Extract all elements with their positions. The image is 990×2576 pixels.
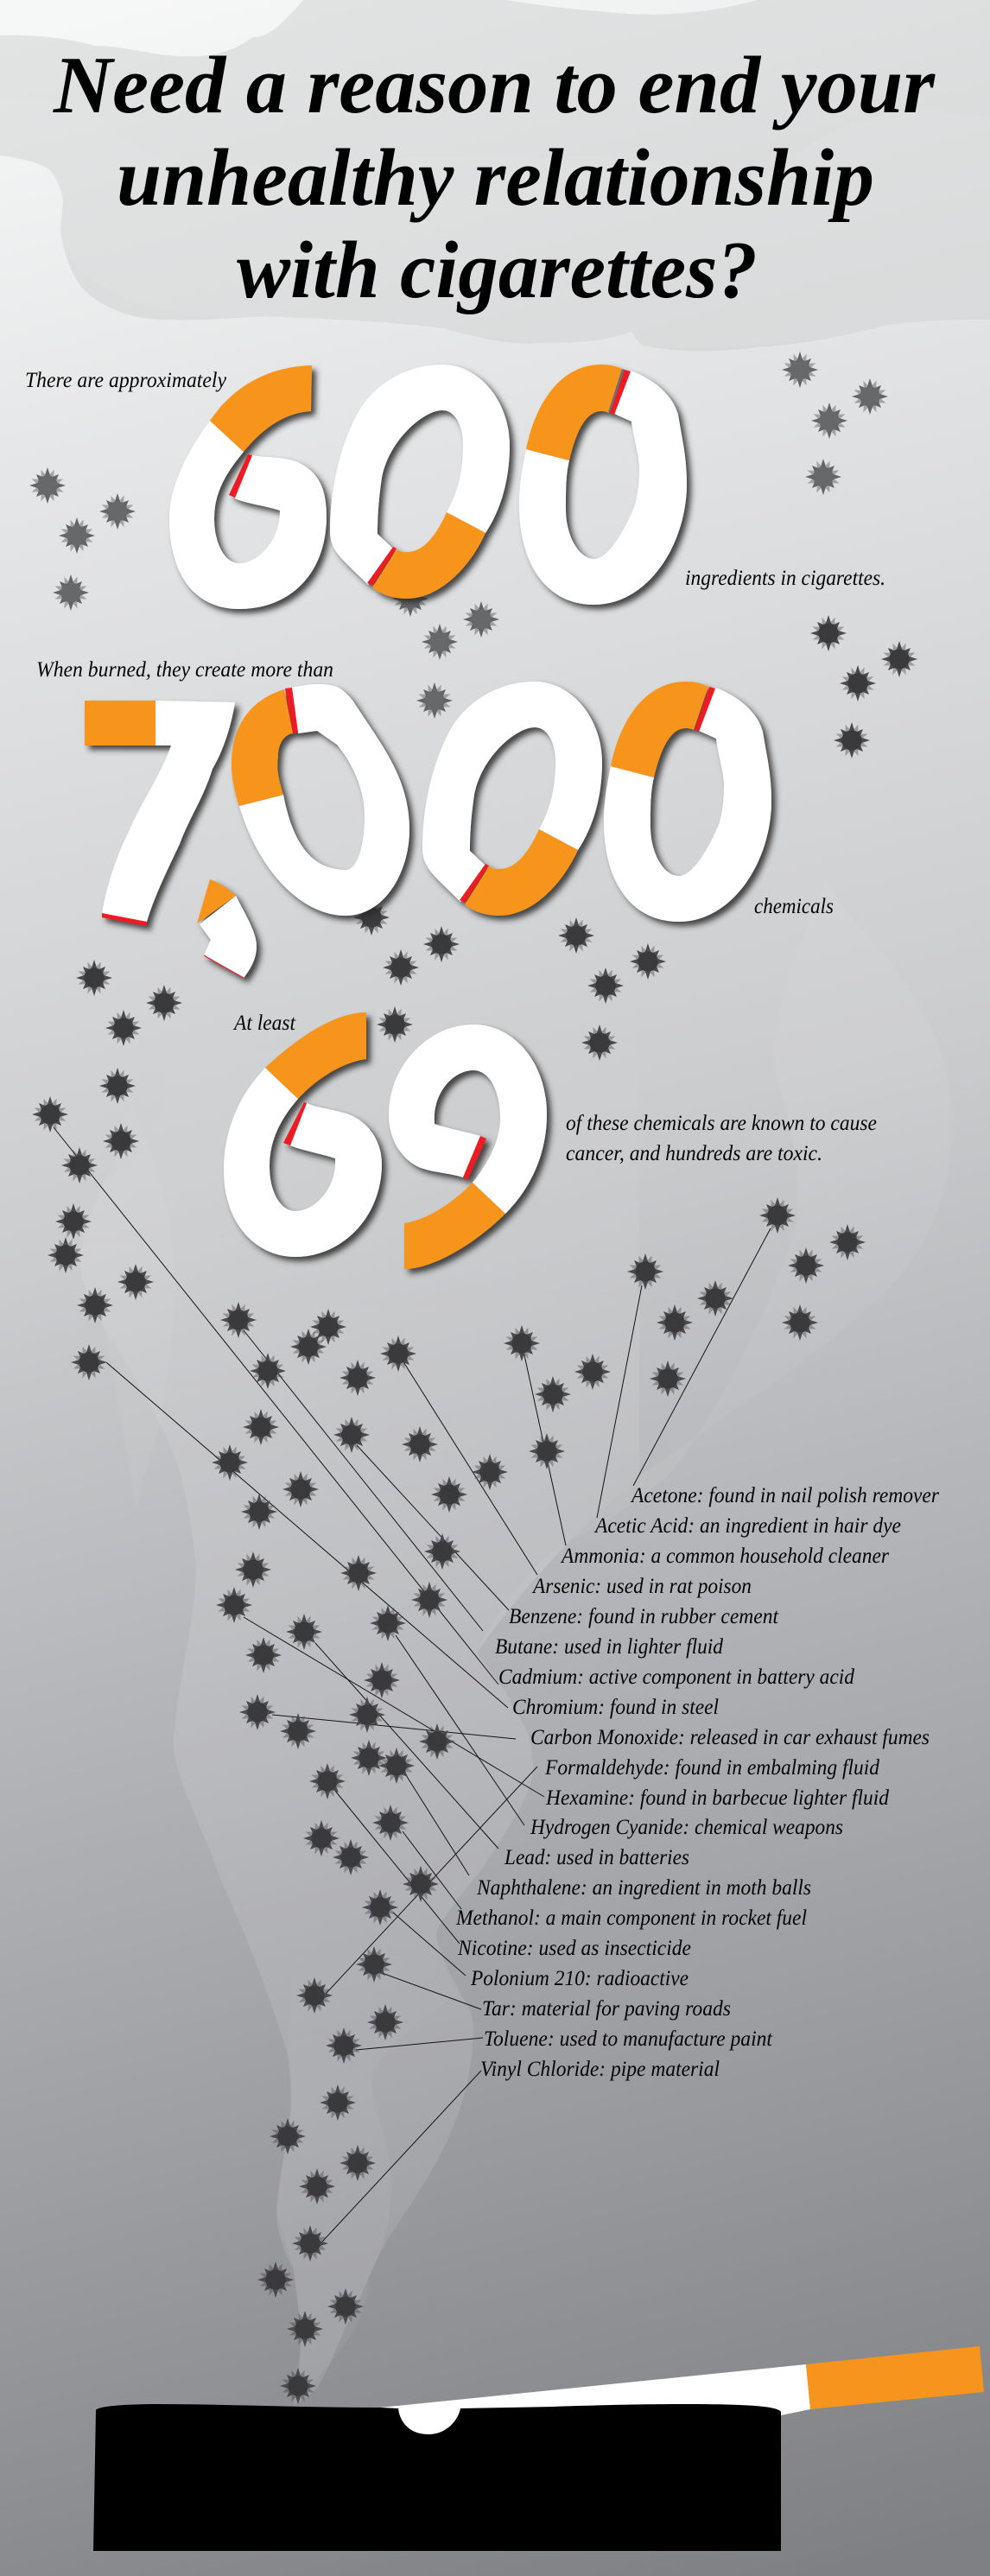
cigarette filter (806, 2346, 984, 2409)
leader line: Lead (315, 1643, 498, 1849)
cigarette in ashtray (380, 2346, 984, 2440)
label: Ammonia: Ammonia: a common household cleaner (560, 1545, 889, 1568)
leader line: Butane (244, 1330, 483, 1631)
leader line: Formaldehyde (326, 1767, 537, 1994)
digit 0 (604, 682, 771, 922)
big number: 600 (169, 365, 687, 609)
label: Cadmium: Cadmium: active component in battery acid (498, 1666, 854, 1689)
label: Chromium: Chromium: found in steel (512, 1696, 719, 1719)
leader line: Vinyl Chloride (322, 2071, 481, 2242)
label: Hydrogen Cyanide: Hydrogen Cyanide: chemical weapons (530, 1816, 843, 1839)
cigarette paper (380, 2364, 810, 2440)
text: known to cause cancer (566, 1112, 877, 1165)
text: There are approximately: There are approximately (25, 369, 227, 392)
digit 6 (169, 365, 327, 609)
label: Carbon Monoxide: Carbon Monoxide: released in car exhaust fumes (530, 1726, 930, 1749)
digit 0 (330, 365, 510, 599)
title: unhealthy relationship (117, 133, 874, 223)
label: Acetone: Acetone: found in nail polish remover (630, 1484, 939, 1507)
text: chemicals: chemicals (754, 895, 834, 918)
comma (197, 879, 257, 978)
big number: 69 (224, 1012, 547, 1269)
digit 9 (389, 1025, 547, 1269)
particles: light upper group (25, 347, 892, 723)
big number: 7,000 (85, 682, 771, 978)
digit 0 (519, 365, 687, 605)
label: Methanol: Methanol: a main component in rocket fuel (455, 1907, 807, 1930)
digit 7 (85, 701, 235, 926)
text: ingredients in cigarettes: ingredients in cigarettes. (685, 567, 885, 590)
label: Toluene: Toluene: used to manufacture paint (484, 2027, 773, 2051)
leader lines (54, 1127, 771, 2242)
text: known to cause cancer: of these chemicals are known to cause (566, 1112, 877, 1135)
digit 6 (224, 1012, 382, 1257)
digit 0 (422, 682, 602, 916)
leader line: Hexamine (244, 1617, 544, 1797)
label: Formaldehyde: Formaldehyde: found in embalming fluid (544, 1756, 879, 1780)
leader line: Polonium 210 (393, 1913, 466, 1976)
label: Benzene: Benzene: found in rubber cement (509, 1605, 779, 1628)
title (53, 41, 936, 315)
label: Arsenic: Arsenic: used in rat poison (531, 1575, 752, 1598)
label: Acetic Acid: Acetic Acid: an ingredient in hair dye (593, 1514, 901, 1538)
label: Butane: Butane: used in lighter fluid (495, 1635, 723, 1659)
leader line: Carbon Monoxide (272, 1715, 516, 1739)
leader line: Cadmium (54, 1127, 498, 1685)
leader line: Acetic Acid (597, 1285, 642, 1518)
digit 0 (232, 684, 409, 916)
leader line: Hydrogen Cyanide (396, 1635, 524, 1825)
leader line: Benzene (357, 1445, 509, 1610)
label: Vinyl Chloride: Vinyl Chloride: pipe material (480, 2058, 720, 2081)
title: Need a reason to end your (53, 41, 936, 130)
label: Hexamine: Hexamine: found in barbecue lighter fluid (545, 1786, 889, 1810)
leader line: Toluene (356, 2038, 483, 2050)
title: with cigarettes? (237, 225, 758, 315)
label: Nicotine: Nicotine: used as insecticide (457, 1937, 691, 1960)
leader line: Acetone (633, 1228, 771, 1486)
leader line: Arsenic (398, 1354, 537, 1575)
leader line: Chromium (106, 1362, 508, 1708)
label: Polonium 210: Polonium 210: radioactive (470, 1967, 689, 1990)
ashtray (93, 2404, 781, 2551)
text: When burned: When burned, they create more than (36, 658, 333, 682)
leader line: Naphthalene (406, 1775, 469, 1875)
label: Naphthalene: Naphthalene: an ingredient in moth balls (476, 1876, 811, 1900)
text: At least: At least (232, 1012, 296, 1035)
leader line: Ammonia (522, 1343, 566, 1545)
text: known to cause cancer: cancer, and hundreds are toxic. (566, 1142, 822, 1165)
particles: dark lower group (28, 611, 922, 2408)
leader line: Tar (384, 1974, 481, 2009)
leader line: Methanol (403, 1831, 461, 1909)
leader line: Nicotine (335, 1791, 460, 1944)
label: Tar: Tar: material for paving roads (482, 1997, 731, 2021)
label: Lead: Lead: used in batteries (504, 1846, 689, 1869)
chemical list (455, 1484, 939, 2081)
